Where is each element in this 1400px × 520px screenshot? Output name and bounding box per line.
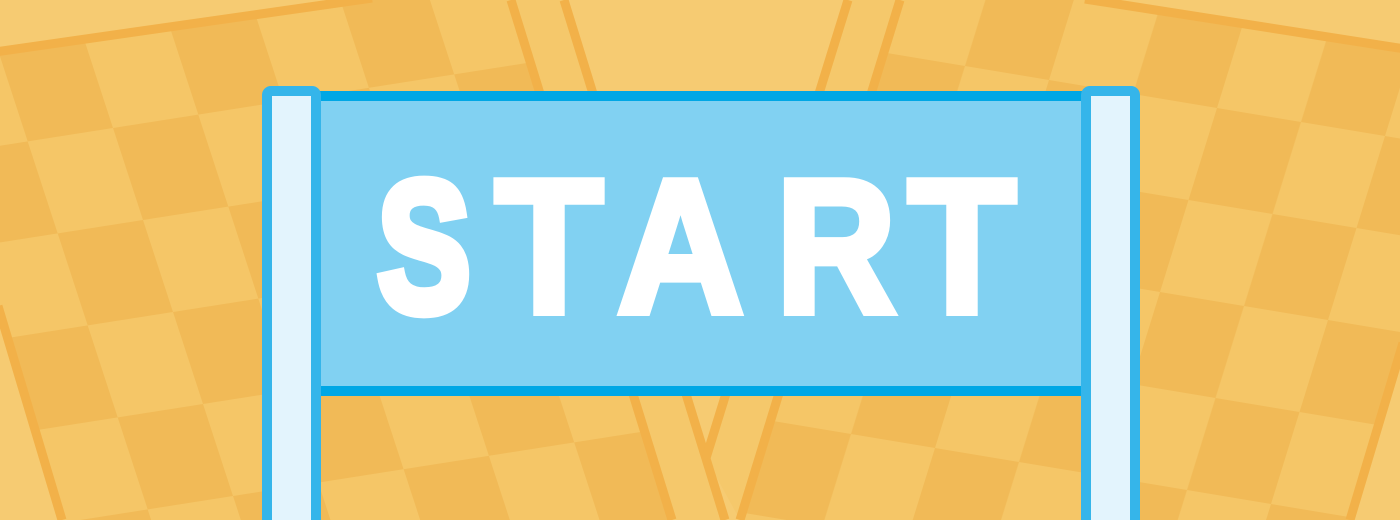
heading: START: T	[907, 139, 1017, 354]
inner lane line 4	[706, 0, 848, 458]
right panel outer edge	[1350, 343, 1400, 520]
right checkered track panel	[740, 0, 1400, 520]
left panel top edge	[0, 0, 372, 52]
inner lane line 3	[740, 0, 900, 520]
inner lane line 1	[511, 0, 672, 520]
heading: START: A	[617, 140, 744, 353]
left panel outer edge	[0, 306, 62, 520]
inner lane line 2	[564, 0, 725, 520]
left pole	[267, 91, 316, 520]
banner fill	[316, 91, 1086, 396]
strip between left track lines	[511, 0, 724, 520]
heading: START: T	[494, 139, 604, 354]
banner bottom edge	[316, 386, 1086, 396]
left checkered track panel	[0, 0, 672, 520]
right pole	[1086, 91, 1135, 520]
right panel top edge	[1085, 0, 1400, 49]
strip between right track lines	[706, 0, 900, 520]
banner	[316, 91, 1086, 396]
heading: START: S	[377, 142, 471, 351]
heading: START	[377, 139, 1017, 354]
banner top edge	[316, 91, 1086, 101]
heading: START: R	[776, 140, 896, 353]
